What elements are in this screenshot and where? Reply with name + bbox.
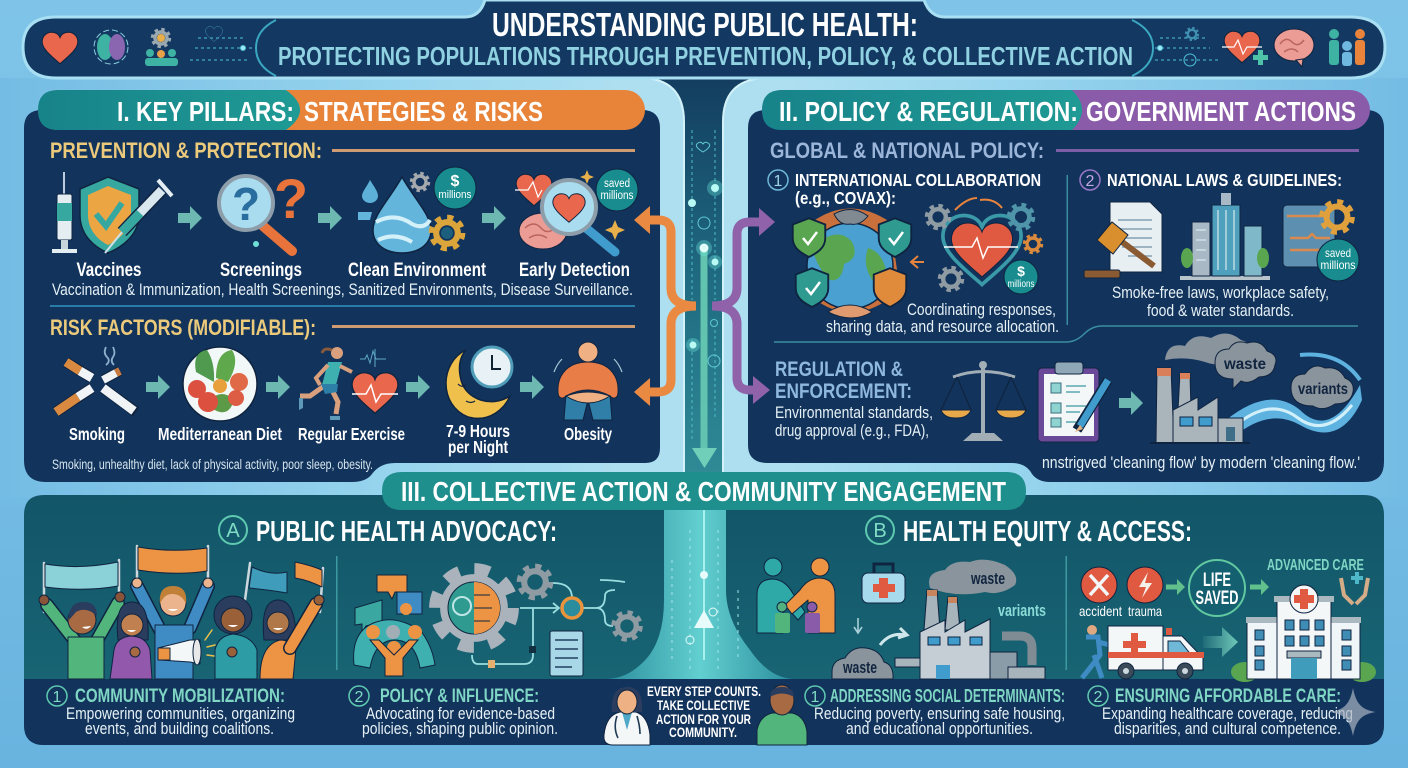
caption: social determinants: 1 [811, 689, 820, 706]
icon: screenings: ? [232, 178, 260, 230]
label: diet: Mediterranean Diet [158, 424, 282, 444]
icon: gavel and document [1084, 202, 1162, 278]
icon: community member [757, 685, 807, 745]
tech decoration left [190, 26, 252, 60]
title: UNDERSTANDING PUBLIC HEALTH: [492, 6, 918, 43]
icon: heart with gears [911, 198, 1041, 294]
caption: community mobilization: Empowering communities, organizing [66, 705, 295, 723]
arrow [146, 375, 170, 399]
caption: community mobilization: events, and building coalitions. [85, 720, 274, 738]
text: call to action: COMMUNITY. [669, 725, 737, 740]
icon: runner and heart [299, 347, 398, 420]
banner: collective action heading [382, 472, 1026, 510]
text: coordinating: Coordinating responses, [907, 300, 1056, 319]
heading pill: key pillars: I. KEY PILLARS: [117, 96, 294, 127]
label: variants: variants [998, 601, 1046, 620]
icon: clean environment: $ [451, 173, 460, 190]
arrow [1119, 391, 1143, 415]
sub-heading: international collaboration [768, 170, 1041, 208]
illustration: speech bubbles and group [354, 575, 435, 676]
icon: factory with waste and water [1150, 333, 1362, 444]
heading: risk factors: RISK FACTORS (MODIFIABLE): [50, 315, 316, 340]
icon: moon and clock [446, 347, 512, 418]
arrow [178, 206, 202, 230]
text: call to action: TAKE COLLECTIVE [657, 698, 750, 713]
header title panel divider [256, 20, 1153, 76]
icon: clean environment: millions [438, 189, 472, 201]
text: regulation description: drug approval (e.g., FDA), [775, 422, 929, 440]
label: exercise: Regular Exercise [298, 424, 405, 444]
heading: health equity [866, 516, 1192, 548]
icon: brain network [94, 30, 128, 64]
heading: regulation and enforcement [775, 358, 912, 403]
caption: community mobilization: COMMUNITY MOBILIZATION: [75, 685, 285, 707]
sub-heading: international collaboration: 1 [774, 173, 783, 190]
icon: factory and waste cloud: waste [842, 658, 877, 677]
heading pill: key pillars: STRATEGIES & RISKS [304, 96, 543, 127]
illustration: crowd with flags [39, 546, 324, 679]
icon: screenings: ? [274, 167, 308, 230]
text: call to action [647, 684, 761, 740]
icon: city buildings [1180, 193, 1270, 280]
panel: key pillars [24, 90, 660, 482]
text: call to action: ACTION FOR YOUR [656, 712, 751, 727]
icon: server and gear: millions [1320, 258, 1356, 272]
heading pill: key pillars [38, 90, 645, 130]
sub-heading: national laws: 2 [1086, 173, 1095, 190]
caption: social determinants: Reducing poverty, ensuring safe housing, [814, 705, 1065, 723]
label: sleep: 7-9 Hours [446, 421, 510, 441]
caption: community mobilization [47, 685, 295, 738]
panel: collective action [24, 495, 1384, 745]
text: prevention description: Vaccination & Immunization, Health Screenings, Sanitized Environments, Disease Surveillance. [52, 281, 633, 299]
icon: first aid kit [862, 564, 905, 603]
label: vaccines: Vaccines [76, 260, 142, 281]
icon: brain [1274, 29, 1314, 67]
heading: public health advocacy [219, 516, 557, 548]
label: smoking: Smoking [69, 424, 125, 444]
icon: early detection [515, 169, 638, 252]
icon: broken cigarettes [56, 347, 136, 412]
label: sleep [446, 421, 510, 457]
caption: affordable care: 2 [1094, 689, 1103, 706]
arrow [266, 375, 290, 399]
icon: community gear [145, 30, 178, 66]
icon: heart [42, 32, 78, 64]
header band [23, 0, 1385, 78]
icon: hospital [1231, 572, 1376, 682]
heading: health equity: B [873, 520, 887, 542]
icon: factory with waste and water: waste [1223, 356, 1266, 373]
text: national laws: Smoke-free laws, workplace safety, [1112, 283, 1329, 302]
text: risk description: Smoking, unhealthy diet, lack of physical activity, poor sleep, obesity. [52, 457, 373, 472]
sub-heading: international collaboration: (e.g., COVAX): [795, 188, 896, 208]
icon: accident and trauma: trauma [1128, 603, 1162, 619]
subtitle: PROTECTING POPULATIONS THROUGH PREVENTION, POLICY, & COLLECTIVE ACTION [278, 41, 1133, 71]
heading pill: policy [762, 90, 1370, 130]
icon: family [1329, 29, 1365, 66]
central column [640, 78, 768, 474]
caption: policy and influence: Advocating for evidence-based [366, 705, 555, 723]
central light channel [605, 510, 795, 679]
caption: policy and influence [349, 685, 558, 738]
label: screenings: Screenings [220, 260, 302, 281]
caption: policy and influence: POLICY & INFLUENCE: [380, 685, 539, 707]
heading: public health advocacy: A [226, 520, 240, 542]
text: regulation description: Environmental standards, [775, 404, 933, 422]
heading: prevention: PREVENTION & PROTECTION: [50, 138, 322, 163]
arrow [520, 375, 544, 399]
arrow: to hospital [1203, 627, 1238, 657]
heading: regulation and enforcement: REGULATION & [775, 358, 903, 381]
panel: policy and regulation [748, 90, 1384, 482]
icon: screenings [219, 167, 308, 251]
icon: clean environment [358, 167, 476, 253]
banner: collective action heading: III. COLLECTIVE ACTION & COMMUNITY ENGAGEMENT [401, 476, 1006, 507]
sub-heading: international collaboration: INTERNATIONAL COLLABORATION [795, 170, 1041, 190]
arrow [1250, 579, 1269, 595]
tech decoration right [1155, 28, 1220, 66]
icon: obesity [554, 342, 622, 420]
icon: factory and waste cloud [832, 560, 1045, 679]
text: coordinating [826, 300, 1059, 336]
caption: affordable care [1088, 685, 1353, 738]
icon: factory and waste cloud: waste [970, 569, 1005, 588]
icon: server and gear: saved [1325, 246, 1351, 260]
caption: affordable care: Expanding healthcare coverage, reducing [1102, 705, 1353, 723]
icon: doctor [604, 687, 650, 745]
icon: heart with gears: $ [1017, 263, 1025, 279]
label: obesity: Obesity [564, 424, 612, 444]
caption: social determinants: and educational opportunities. [846, 720, 1033, 738]
icon: clipboard [1038, 362, 1108, 442]
connector: orange bracket [634, 206, 696, 406]
heading: health equity: HEALTH EQUITY & ACCESS: [903, 516, 1192, 548]
label: advanced care: ADVANCED CARE [1267, 557, 1364, 574]
text: regulation description [775, 404, 933, 440]
caption: social determinants [805, 686, 1065, 738]
icon: factory with waste and water: variants [1298, 381, 1348, 398]
text: call to action: EVERY STEP COUNTS. [647, 684, 761, 699]
arrow [406, 375, 430, 399]
label: early detection: Early Detection [519, 260, 630, 281]
caption: social determinants: ADDRESSING SOCIAL DETERMINANTS: [830, 686, 1065, 706]
icon: heart with gears: millions [1008, 279, 1034, 290]
heading: public health advocacy: PUBLIC HEALTH ADVOCACY: [256, 516, 557, 548]
icon: mediterranean diet [183, 347, 257, 421]
text: national laws: food & water standards. [1147, 301, 1294, 320]
caption: community mobilization: 1 [53, 689, 62, 706]
icon: early detection: millions [600, 190, 634, 202]
icon: globe with shields [793, 208, 911, 318]
illustration: family [757, 558, 835, 633]
callout: life saved [1189, 560, 1245, 616]
connector: purple bracket [712, 208, 775, 404]
caption: policy and influence: 2 [355, 689, 364, 706]
icon: heart with plus [1222, 31, 1268, 65]
callout: life saved: LIFE [1203, 570, 1231, 591]
caption: affordable care: disparities, and cultural competence. [1114, 720, 1341, 738]
illustration: gear and flow [437, 567, 640, 676]
icon: accident and trauma [1079, 567, 1163, 619]
label: sleep: per Night [448, 437, 508, 457]
text: national laws [1112, 283, 1329, 320]
arrow [318, 206, 342, 230]
heading pill: policy: II. POLICY & REGULATION: [779, 96, 1078, 127]
sub-heading: national laws: NATIONAL LAWS & GUIDELINES: [1107, 170, 1342, 190]
icon: scales [941, 361, 1026, 441]
arrow [1166, 579, 1185, 595]
icon: accident and trauma: accident [1079, 603, 1122, 619]
text: coordinating: sharing data, and resource allocation. [826, 317, 1059, 336]
icon: ambulance with paramedic [1082, 625, 1204, 679]
label: clean environment: Clean Environment [348, 260, 487, 281]
heading: global and national policy: GLOBAL & NATIONAL POLICY: [770, 138, 1044, 163]
arrow [482, 206, 506, 230]
callout: life saved: SAVED [1196, 588, 1238, 609]
icon: early detection: saved [604, 178, 630, 190]
icon: vaccines [52, 172, 172, 253]
icon: server and gear [1283, 202, 1359, 281]
text: cleaning flow: nnstrigved 'cleaning flow' by modern 'cleaning flow.' [1042, 454, 1360, 472]
heading: regulation and enforcement: ENFORCEMENT: [775, 380, 912, 403]
icon: sparkle [1330, 688, 1376, 736]
caption: policy and influence: policies, shaping public opinion. [362, 720, 558, 738]
